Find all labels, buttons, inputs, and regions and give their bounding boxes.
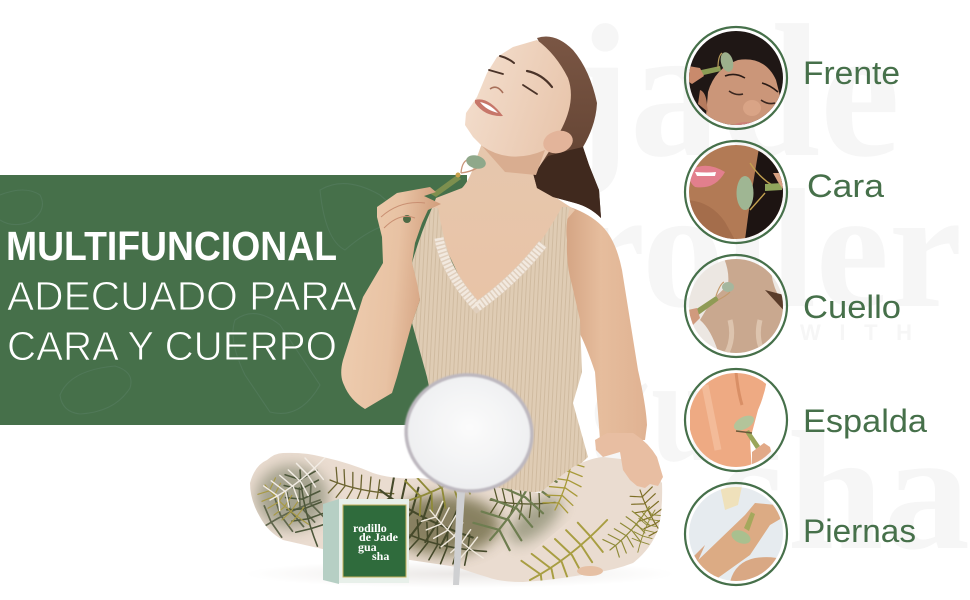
box title text: sha [372, 549, 389, 563]
banner gua sha outlines [0, 184, 415, 414]
mirror stand [453, 492, 465, 585]
trouser leaf print [250, 457, 662, 581]
box green label [343, 505, 406, 577]
banner heading: MULTIFUNCIONAL [6, 223, 337, 269]
smiling lips [475, 99, 503, 116]
box side [323, 499, 339, 584]
woman with jade roller [238, 36, 672, 597]
shadow under jaw [482, 146, 545, 175]
hair and ponytail [533, 36, 601, 218]
item: Piernas [684, 482, 916, 586]
patterned trousers [250, 453, 662, 582]
photo: roller on neck [689, 259, 783, 353]
photo: roller on forehead [689, 31, 783, 125]
item: Cuello [684, 254, 901, 358]
jade roller on neck [431, 153, 487, 197]
label: Cuello [803, 289, 901, 325]
ring [685, 27, 787, 129]
box title text: gua [358, 540, 377, 554]
roller end in hand [403, 215, 411, 223]
ring [685, 483, 787, 585]
label: Cara [807, 168, 884, 204]
hand resting on knee [595, 433, 663, 488]
ring [685, 369, 787, 471]
banner heading: CARA Y CUERPO [7, 323, 337, 369]
finger lines [381, 203, 425, 228]
teeth [480, 102, 498, 113]
item: Cara [684, 140, 884, 244]
item: Frente [684, 26, 900, 130]
raised hand and forearm [341, 187, 441, 409]
label: Espalda [803, 403, 927, 439]
face and jaw [465, 40, 571, 172]
panel: green banner [0, 175, 467, 425]
lace neckline [439, 238, 543, 307]
ring [685, 255, 787, 357]
background watermark lettering: sha [720, 397, 970, 585]
closed eyes and brows [489, 56, 552, 94]
ribbed tank top [412, 207, 588, 500]
background watermark lettering: gua [590, 327, 780, 493]
background watermark lettering: roller [572, 155, 962, 343]
background watermark lettering: WITH [800, 320, 912, 345]
woman chest and neck [430, 143, 575, 320]
box title text: rodillo [353, 521, 387, 535]
photo: roller on leg [689, 487, 783, 581]
label: Frente [803, 55, 900, 91]
ring [685, 141, 787, 243]
ear [541, 127, 575, 157]
box title text [353, 521, 399, 563]
box title text: de Jade [359, 530, 399, 544]
box front [339, 499, 409, 583]
banner heading [6, 223, 358, 369]
foot at floor [577, 566, 603, 576]
round mirror [399, 367, 539, 499]
item: Espalda [684, 368, 927, 472]
label: Piernas [803, 513, 916, 549]
floor shadow [245, 560, 675, 588]
background watermark lettering [568, 0, 970, 585]
product box [323, 499, 409, 584]
nose [490, 87, 503, 93]
photo: roller on cheek [689, 145, 783, 239]
woman right arm [555, 207, 647, 440]
banner heading: ADECUADO PARA [7, 273, 358, 319]
photo: roller on back [690, 373, 772, 467]
